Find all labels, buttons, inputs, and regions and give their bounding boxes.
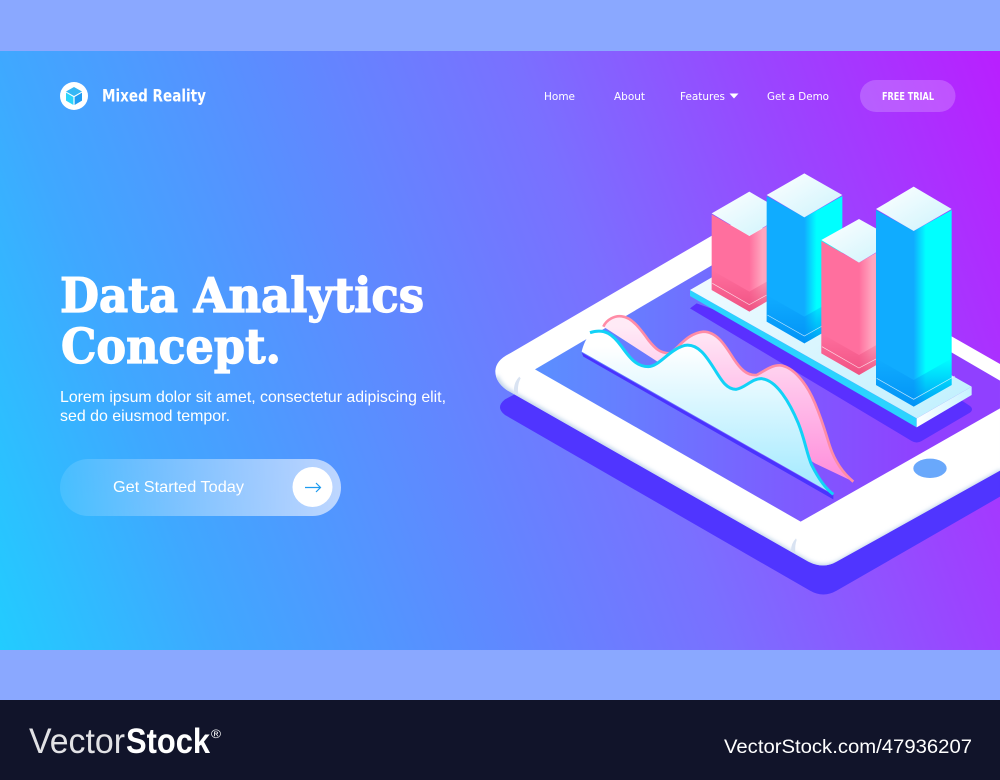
- bar: blue 1: [767, 173, 842, 343]
- button: get started today: [60, 459, 341, 516]
- area chart: [582, 316, 853, 499]
- nav link: Features: Features: [680, 90, 725, 103]
- body text: [60, 389, 446, 425]
- bar: blue 2: [876, 187, 955, 407]
- nav link: Get a Demo: Get a Demo: [767, 90, 829, 103]
- tablet body: [495, 217, 1000, 567]
- button: get started today: Get Started Today: [113, 479, 244, 496]
- icon: cube badge: [60, 82, 88, 110]
- bar: pink 2: [821, 219, 897, 375]
- tablet screen: [535, 239, 1000, 522]
- title: Data Analytics: [60, 268, 424, 324]
- bar chart: [712, 173, 955, 407]
- nav link: Home: Home: [544, 90, 575, 103]
- area: blue front wave shadow: [582, 353, 833, 499]
- navigation: [544, 80, 956, 112]
- brand name: Mixed Reality: [102, 86, 206, 106]
- footer logo: VectorStock: [29, 722, 221, 761]
- footer logo: VectorStock: Vector: [29, 722, 125, 761]
- body text: Lorem ipsum dolor sit amet, consectetur adipiscing elit,: [60, 389, 446, 406]
- hero background: [0, 51, 1000, 650]
- home button: [913, 459, 947, 478]
- footer logo: VectorStock: ®: [211, 727, 221, 741]
- button: free trial: FREE TRIAL: [882, 91, 934, 103]
- tablet shadow: [500, 392, 1000, 594]
- bottom band: [0, 650, 1000, 700]
- footer image id: VectorStock.com/47936207: [724, 737, 972, 758]
- area: pink back wave: [603, 316, 853, 482]
- chart platform: [690, 258, 972, 427]
- logo: Mixed Reality: [60, 82, 206, 110]
- footer logo: VectorStock: Stock: [126, 722, 210, 761]
- icon: dropdown arrow: [730, 94, 738, 98]
- top band: [0, 0, 1000, 51]
- body text: sed do eiusmod tempor.: [60, 408, 230, 425]
- icon: arrow in circle: [292, 467, 332, 507]
- platform shadow: [690, 303, 972, 442]
- title: Concept.: [61, 319, 281, 375]
- area: blue front wave: [582, 330, 833, 494]
- bar: pink 1: [712, 192, 787, 312]
- title: [60, 268, 424, 375]
- nav link: About: About: [614, 90, 646, 103]
- illustration: isometric tablet with charts: [495, 173, 1000, 594]
- footer bar: [0, 700, 1000, 780]
- button: free trial: [860, 80, 956, 112]
